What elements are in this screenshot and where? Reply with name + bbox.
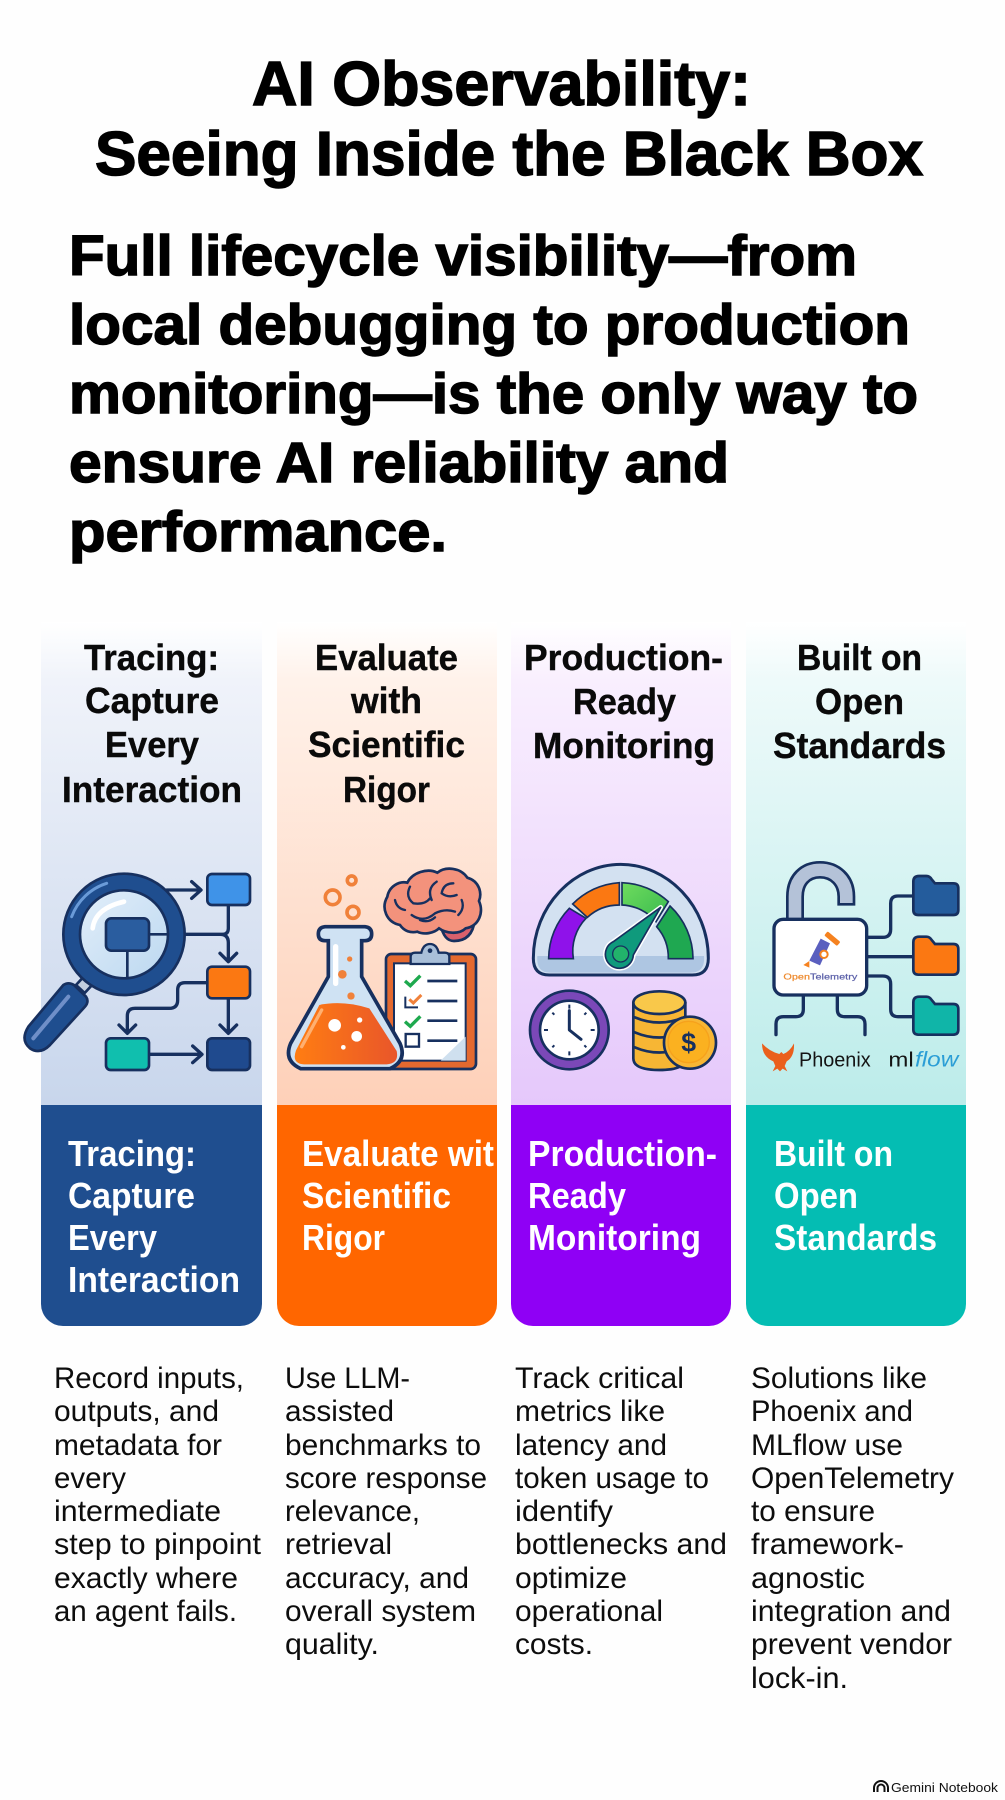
icon: phoenix logo: Phoenix [799, 1050, 871, 1072]
icon: coin stack [633, 991, 716, 1070]
heading: monitoring [524, 637, 723, 766]
description: open standards: Solutions like [751, 1362, 927, 1395]
description: evaluate: quality. [285, 1628, 379, 1661]
heading: evaluate [308, 637, 465, 810]
icon: coin stack: $ [681, 1028, 696, 1058]
coloured banner: open standards: Built on [774, 1133, 893, 1174]
heading: monitoring: Production- [524, 637, 723, 678]
description: open standards: framework- [751, 1528, 904, 1561]
description: evaluate: relevance, [285, 1495, 420, 1528]
icon: connector lines [776, 896, 913, 1035]
description: tracing: Record inputs, [54, 1362, 244, 1395]
heading: evaluate: Rigor [343, 769, 430, 810]
coloured banner: open standards: Standards [774, 1217, 937, 1258]
coloured banner: tracing: Every [68, 1217, 157, 1258]
description: monitoring: costs. [515, 1628, 593, 1661]
description: open standards: MLflow use [751, 1429, 903, 1462]
description: tracing: outputs, and [54, 1395, 219, 1428]
description: monitoring: identify [515, 1495, 613, 1528]
description: monitoring: bottlenecks and [515, 1528, 727, 1561]
description: open standards: integration and [751, 1595, 951, 1628]
coloured banner: tracing: Tracing: [68, 1133, 196, 1174]
icon: padlock [774, 862, 867, 995]
description: evaluate: benchmarks to [285, 1429, 481, 1462]
icon: padlock with folders and logos [762, 862, 960, 1072]
panel background [277, 622, 497, 1106]
description: tracing: an agent fails. [54, 1595, 237, 1628]
subtitle statement: performance. [69, 500, 447, 564]
description: evaluate: assisted [285, 1395, 394, 1428]
panel: monitoring [511, 622, 731, 1661]
heading: open standards: Built on [797, 637, 922, 678]
description: tracing: exactly where [54, 1562, 238, 1595]
subtitle statement: Full lifecycle visibility—from [69, 224, 857, 288]
footer: gemini notebook badge: Gemini Notebook [891, 1780, 999, 1795]
panel background [511, 622, 731, 1106]
description: tracing: intermediate [54, 1495, 221, 1528]
description: open standards: prevent vendor [751, 1628, 952, 1661]
description: monitoring: operational [515, 1595, 663, 1628]
icon: flask, brain and checklist [288, 869, 481, 1069]
coloured banner: open standards [746, 1105, 966, 1326]
description: open standards: lock-in. [751, 1662, 848, 1695]
description: evaluate: Use LLM- [285, 1362, 410, 1395]
description: tracing: every [54, 1462, 126, 1495]
description: evaluate: overall system [285, 1595, 476, 1628]
icon: magnifier over flow diagram [25, 874, 250, 1070]
heading: tracing: Every [105, 724, 199, 765]
panel: evaluate [277, 622, 497, 1661]
subtitle statement: monitoring—is the only way to [69, 362, 918, 426]
title: AI Observability: [252, 50, 751, 119]
coloured banner: evaluate: Evaluate wit [302, 1133, 494, 1174]
description: evaluate [285, 1362, 487, 1661]
description: monitoring: optimize [515, 1562, 627, 1595]
description: evaluate: retrieval [285, 1528, 392, 1561]
description: monitoring: latency and [515, 1429, 667, 1462]
description: open standards [751, 1362, 954, 1695]
description: open standards: agnostic [751, 1562, 865, 1595]
icon: mlflow logo: ml [888, 1050, 914, 1072]
coloured banner: monitoring: Monitoring [528, 1217, 701, 1258]
icon: gauge, clock and coins [530, 864, 716, 1070]
heading: tracing [62, 637, 242, 810]
heading: tracing: Tracing: [84, 637, 219, 678]
description: open standards: Phoenix and [751, 1395, 913, 1428]
coloured banner: monitoring [511, 1105, 731, 1326]
coloured banner: monitoring: Production- [528, 1133, 717, 1174]
panel background [41, 622, 262, 1106]
heading: open standards [773, 637, 946, 766]
title [95, 50, 924, 189]
icon: folders [913, 876, 958, 1035]
heading: tracing: Interaction [62, 769, 242, 810]
icon: mlflow logo: flow [915, 1048, 960, 1072]
description: monitoring: metrics like [515, 1395, 665, 1428]
heading: monitoring: Monitoring [533, 725, 715, 766]
icon: mlflow logo [888, 1048, 960, 1072]
coloured banner: tracing: Interaction [68, 1259, 240, 1300]
coloured banner: evaluate: Rigor [302, 1217, 385, 1258]
icon: gauge [533, 864, 708, 975]
icon: padlock: Open Telemetry [783, 971, 858, 981]
coloured banner: monitoring: Ready [528, 1175, 626, 1216]
heading: evaluate: with [350, 680, 422, 721]
icon: clock [530, 991, 609, 1069]
subtitle statement: ensure AI reliability and [69, 431, 729, 495]
description: tracing: step to pinpoint [54, 1528, 262, 1561]
coloured banner: evaluate: Scientific [302, 1175, 451, 1216]
description: monitoring: Track critical [515, 1362, 684, 1395]
panel background [746, 622, 966, 1106]
description: tracing: metadata for [54, 1429, 222, 1462]
subtitle statement: local debugging to production [69, 293, 910, 357]
heading: tracing: Capture [85, 680, 219, 721]
icon: clipboard [386, 944, 476, 1069]
heading: evaluate: Evaluate [315, 637, 458, 678]
description: open standards: to ensure [751, 1495, 875, 1528]
coloured banner: tracing: Capture [68, 1175, 195, 1216]
icon: brain [385, 869, 481, 941]
heading: evaluate: Scientific [308, 724, 465, 765]
icon: phoenix logo [762, 1043, 871, 1072]
description: open standards: OpenTelemetry [751, 1462, 954, 1495]
icon: flask [288, 927, 402, 1069]
description: monitoring [515, 1362, 727, 1661]
heading: open standards: Standards [773, 725, 946, 766]
coloured banner: evaluate [277, 1105, 497, 1326]
panel: open standards [746, 622, 966, 1695]
panel: tracing [25, 622, 262, 1628]
heading: open standards: Open [815, 681, 904, 722]
title: Seeing Inside the Black Box [95, 120, 924, 189]
subtitle statement [69, 224, 918, 564]
icon: bubbles [325, 876, 359, 918]
description: tracing [54, 1362, 262, 1628]
description: evaluate: accuracy, and [285, 1562, 469, 1595]
description: evaluate: score response [285, 1462, 487, 1495]
coloured banner: tracing [41, 1105, 262, 1326]
coloured banner: open standards: Open [774, 1175, 858, 1216]
heading: monitoring: Ready [573, 681, 676, 722]
description: monitoring: token usage to [515, 1462, 709, 1495]
